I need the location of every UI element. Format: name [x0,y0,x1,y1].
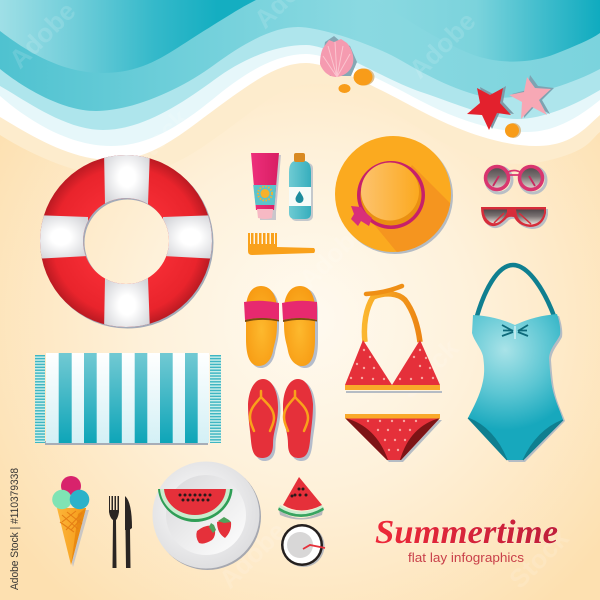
icon: red flip-flops [248,379,316,461]
icon: aviator sunglasses [481,207,548,229]
medium water band [0,0,600,111]
deep water left [0,0,256,73]
watermarks: Adobe [43,141,121,219]
bikini bottom leg shading [345,418,440,460]
swimsuit front tie [502,325,528,336]
wet sand band [0,0,600,160]
bikini knot [366,286,402,294]
watermarks: Stock [393,333,465,404]
ring right band [163,215,212,258]
hat bow [351,206,372,226]
bikini bottom dots [367,420,417,451]
light water band [0,0,600,130]
strawberry left [196,523,216,544]
left flip-flop [248,379,280,461]
sea waves [0,0,600,177]
bikini straps [364,294,420,342]
towel stripes [59,353,198,443]
stock id caption: Adobe Stock | #110379338 [9,468,21,590]
icon: round sunglasses [486,166,546,193]
bikini top dots [350,349,434,380]
icon: comb [248,233,315,255]
icon: ice cream cone [52,476,89,567]
ring bottom band [104,278,150,332]
icon: red starfish [467,86,514,130]
outer wet sand band [0,0,600,177]
icon: sunscreen tube [251,153,281,220]
ring top band [104,150,150,204]
hat band [357,161,425,229]
icon: orange pebble [505,123,521,138]
hat long shadow [374,165,450,252]
watermarks: Adobe [43,366,121,444]
icon: coconut with straw [281,524,325,567]
towel fringe left [35,355,45,443]
right flip-flop [283,379,316,461]
icon: one-piece swimsuit [468,265,565,462]
towel fringe right [210,355,221,443]
right slide [282,286,318,368]
icon: fork [109,496,119,568]
icon: pink starfish [509,75,554,119]
watermarks: Stock [503,523,575,594]
deep water right [375,0,600,62]
subtitle: flat lay infographics [408,551,524,565]
watermarks: Adobe [213,516,291,594]
watermelon half [158,489,232,522]
title [375,514,558,565]
foam band [0,0,600,146]
watermarks: Stock [123,103,195,174]
hat crown [361,162,419,220]
heading: Summertime: Summertime [375,514,558,551]
icon: sun hat [335,136,455,262]
icon: watermelon slice [278,477,324,520]
icon: striped towel [35,353,221,445]
watermarks: Adobe [403,6,481,84]
icon: pebbles near shell [338,68,374,93]
icon: lotion bottle [289,153,313,221]
strawberry right [217,517,231,538]
icon: knife [125,496,132,568]
swimsuit straps [477,265,554,316]
swimsuit leg shading [468,418,563,460]
icon: bikini top [345,286,442,393]
icon: bikini bottom [345,414,442,462]
ring left band [40,215,88,258]
watermarks: Adobe [293,216,371,294]
icon: life ring [34,150,218,332]
icon: orange slides [244,286,318,368]
left slide [244,286,279,368]
icon: seashell [320,36,357,77]
icon: plate with fruit [152,462,261,570]
